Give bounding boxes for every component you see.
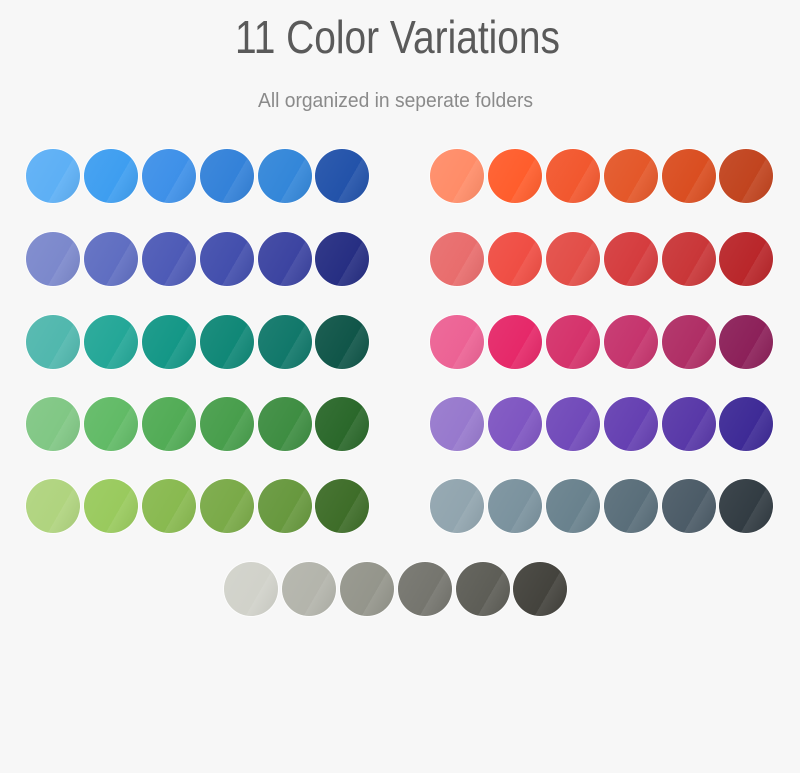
panel: right color swatches xyxy=(430,149,773,533)
panel: grey swatches xyxy=(224,562,567,616)
title: 11 Color Variations xyxy=(235,11,560,63)
title xyxy=(235,11,560,112)
title: All organized in seperate folders xyxy=(258,90,533,112)
panel: left color swatches xyxy=(26,149,369,533)
